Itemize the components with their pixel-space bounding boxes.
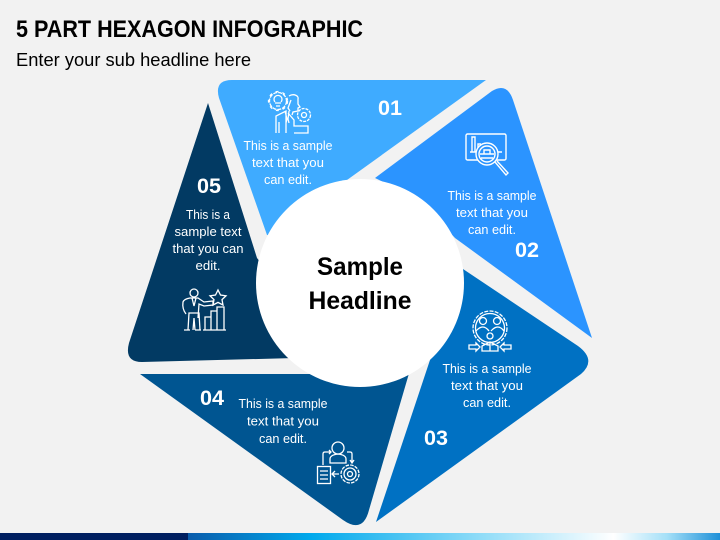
text 2: text that you [456, 206, 528, 220]
number 04: 04 [200, 387, 224, 410]
panel 3 [376, 269, 588, 522]
text 2: can edit. [468, 223, 516, 237]
text 5: sample text [174, 225, 242, 239]
text 4: text that you [247, 414, 319, 428]
number 01: 01 [378, 97, 402, 120]
center headline: Sample [317, 253, 403, 281]
text 5 [172, 208, 244, 273]
center headline: Headline [308, 287, 412, 315]
subtitle: Enter your sub headline here [16, 50, 251, 70]
text 3: text that you [451, 379, 523, 393]
title: 5 PART HEXAGON INFOGRAPHIC [16, 16, 363, 43]
icon: process person [318, 442, 359, 484]
number 03: 03 [424, 427, 448, 450]
center circle [256, 179, 464, 387]
text 4 [238, 397, 328, 446]
text 1: text that you [252, 156, 324, 170]
panel 5 [128, 103, 295, 362]
icon: thinker with gears [268, 92, 310, 133]
panel 4 [140, 370, 410, 525]
icon: businessman with chart and star [183, 289, 226, 330]
text 4: can edit. [259, 432, 307, 446]
text 5: edit. [196, 259, 220, 273]
icon: team circle [469, 311, 511, 351]
text 1 [244, 139, 333, 187]
text 3: This is a sample [442, 362, 532, 376]
text 2: This is a sample [448, 189, 537, 203]
text 1: can edit. [264, 173, 312, 187]
text 5: that you can [172, 242, 244, 256]
text 5: This is a [186, 208, 230, 222]
footer bar [0, 533, 720, 540]
text 3: can edit. [463, 396, 511, 410]
text 1: This is a sample [244, 139, 333, 153]
text 4: This is a sample [238, 397, 328, 411]
number 02: 02 [515, 239, 539, 262]
center headline [308, 253, 412, 315]
text 2 [448, 189, 537, 237]
panel 2 [375, 88, 592, 338]
panel 1 [218, 80, 486, 240]
text 3 [442, 362, 532, 410]
number 05: 05 [197, 175, 221, 198]
icon: chart with magnifier [466, 134, 508, 175]
